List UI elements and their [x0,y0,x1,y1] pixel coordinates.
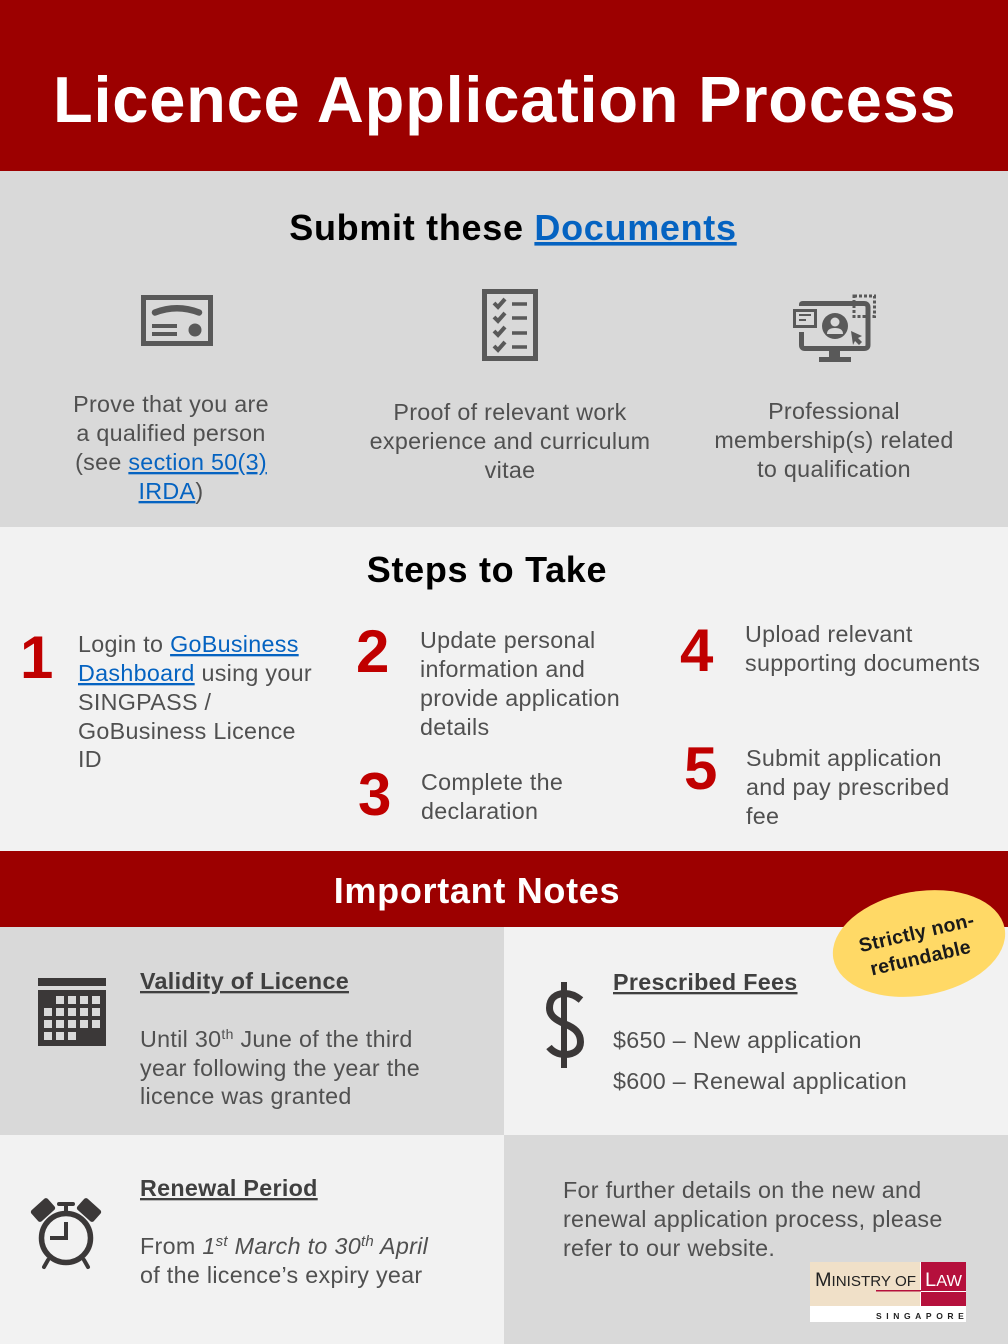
text: validity period: year following the year the [140,1055,420,1081]
text: renewal dates: st [216,1233,228,1250]
text: professional membership: Professional [768,398,900,424]
step 1: Login to GoBusiness [78,631,299,657]
text: qualified person [73,391,269,504]
callout: strictly non-refundable: Strictly non- [857,909,976,957]
step 2: Update personal [420,627,595,653]
icon: monitor with profile [794,296,874,362]
step 5: Submit application [746,745,942,771]
heading: validity of licence: Validity of Licence [140,968,349,994]
step 4: Upload relevant [745,621,913,647]
text: further details: refer to our website. [563,1235,775,1261]
panel: renewal period [0,1135,504,1344]
heading: submit documents: Submit these Documents [289,207,737,248]
panel: validity of licence [0,927,504,1135]
step 3: 3 [358,761,391,828]
step 5: and pay prescribed [746,774,950,800]
step 2: information and [420,656,585,682]
text: qualified person: Prove that you are [73,391,269,417]
step 4: 4 [680,617,714,684]
title: Licence Application Process [53,63,956,136]
panel: title banner [0,0,1008,171]
text: validity period: June of the third [234,1026,413,1052]
text: qualified person: a qualified person [76,420,266,446]
icon: certificate [144,298,210,344]
text: work experience: Proof of relevant work [393,399,627,425]
text: validity period [140,1026,420,1109]
logo: ministry of law: MINISTRY OF [815,1270,916,1291]
step 1: SINGPASS / [78,689,212,715]
text: validity period: Until 30 [140,1026,221,1052]
text: renewal dates: of the licence’s expiry year [140,1262,422,1288]
text: renewal dates: April [374,1233,429,1259]
text: fee amounts: $650 – New application [613,1027,862,1053]
text: work experience: vitae [485,457,535,483]
text: further details [563,1177,943,1261]
step 3: declaration [421,798,538,824]
heading: prescribed fees: Prescribed Fees [613,969,798,995]
text: work experience [370,399,650,483]
text: professional membership: membership(s) related [714,427,954,453]
step 1: GoBusiness Licence [78,718,296,744]
heading: steps to take: Steps to Take [367,549,607,590]
icon: dollar sign [549,982,581,1068]
text: renewal dates: From 1 [140,1233,216,1259]
heading: renewal period: Renewal Period [140,1175,318,1201]
panel: prescribed fees [504,927,1008,1135]
step 2: 2 [356,618,389,685]
text: fee amounts: $600 – Renewal application [613,1068,907,1094]
logo: ministry of law [810,1262,968,1322]
callout: strictly non-refundable [824,877,1008,1010]
text: further details: For further details on the new and [563,1177,922,1203]
text: work experience: experience and curriculum [370,428,650,454]
callout: strictly non-refundable: refundable [868,936,973,980]
text: renewal dates [140,1233,429,1288]
icon: checklist [484,292,536,358]
icon: alarm clock [30,1197,102,1267]
text: professional membership: to qualification [757,456,911,482]
step 5: fee [746,803,779,829]
step 3: Complete the [421,769,563,795]
step 2: provide application [420,685,620,711]
step 1: 1 [20,624,53,691]
text: renewal dates: March to 30 [228,1233,361,1259]
text: qualified person: (see section 50(3) [75,449,267,475]
step 4: supporting documents [745,650,980,676]
heading: important notes: Important Notes [334,870,620,911]
step 5: 5 [684,735,717,802]
panel: further details [504,1135,1008,1344]
logo: ministry of law: SINGAPORE [876,1311,968,1321]
step 1 [20,624,312,772]
step 2: details [420,714,489,740]
text: qualified person: IRDA) [139,478,203,504]
icon: calendar [38,978,106,1046]
text: renewal dates: th [361,1233,374,1250]
panel: steps to take [0,527,1008,851]
step 1: Dashboard using your [78,660,312,686]
panel: important notes banner [0,851,1008,927]
logo: ministry of law: LAW [925,1270,962,1291]
text: fee amounts [613,1027,907,1094]
step 2 [356,618,620,740]
step 5 [684,735,950,829]
text: professional membership [714,398,954,482]
step 4 [680,617,980,684]
text: further details: renewal application process, please [563,1206,943,1232]
step 1: ID [78,746,102,772]
text: validity period: th [221,1026,234,1042]
text: validity period: licence was granted [140,1083,352,1109]
step 3 [358,761,563,828]
panel: submit documents [0,171,1008,527]
